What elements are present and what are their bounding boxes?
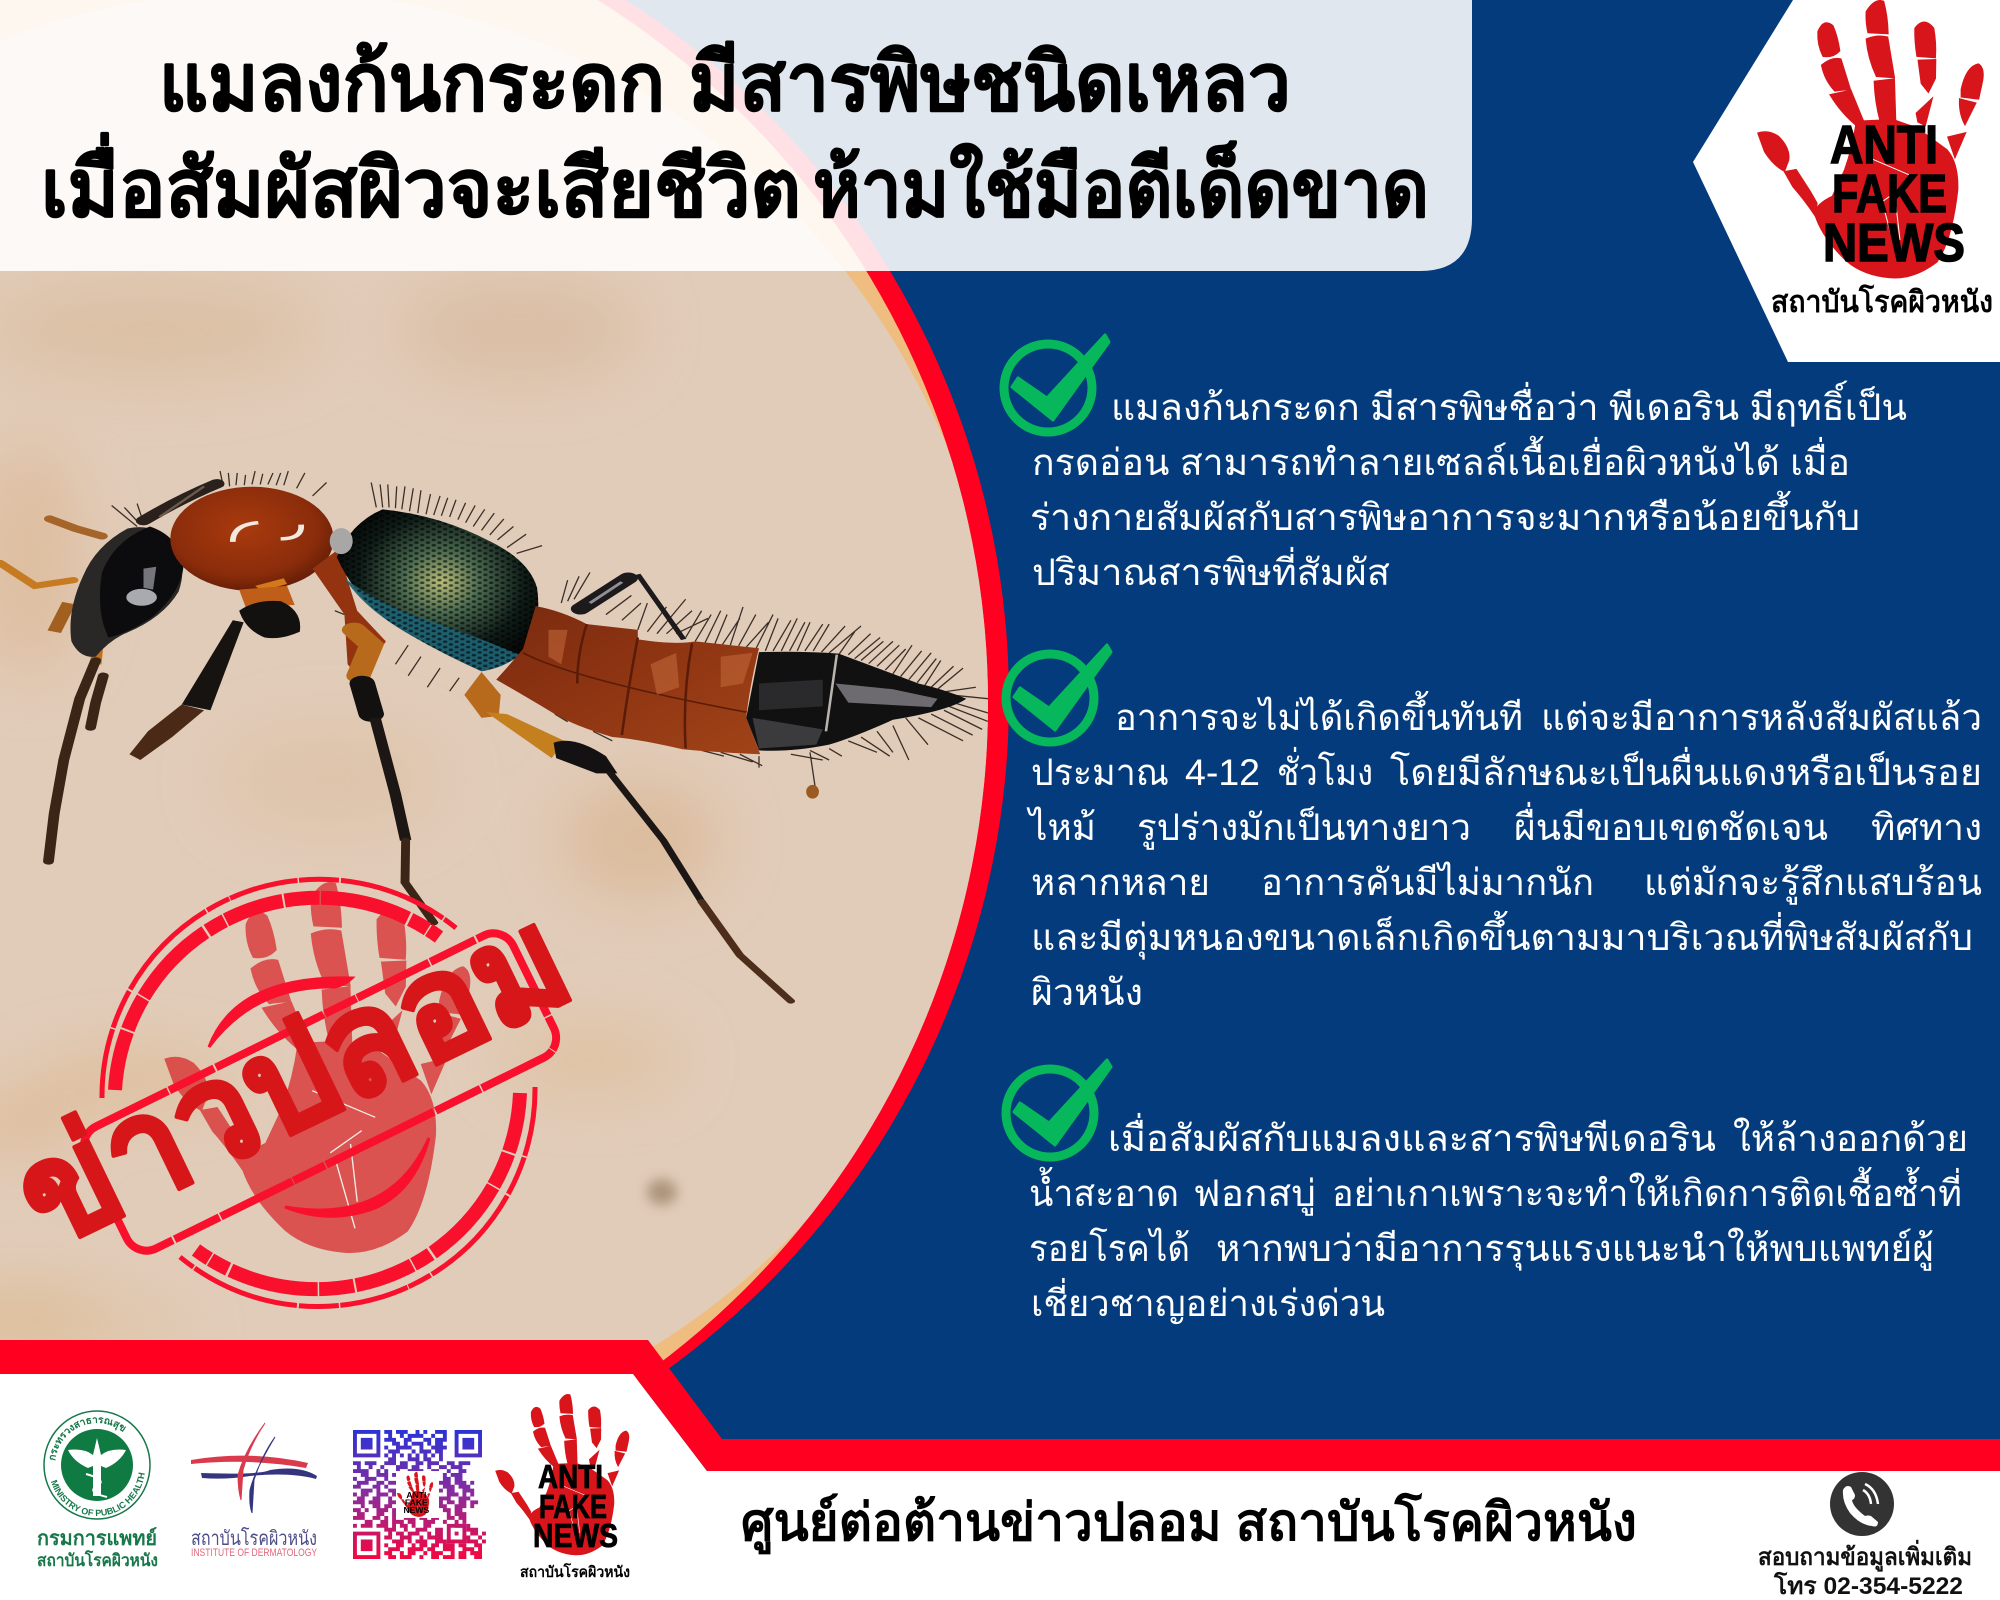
neck [312,552,386,667]
emblem swooshes [191,1423,317,1513]
title [41,38,1429,233]
fact 3 text: รอยโรคได้ [1029,1227,1190,1269]
fact 2 text: ประมาณ [1031,752,1169,793]
photo: rove beetle on beige skin [0,271,988,1346]
logo text: สถาบันโรคผิวหนัง [191,1527,317,1550]
qr centre hand: NEWS [403,1505,429,1515]
stamp: rounded frame [76,926,564,1258]
qr centre hand: FAKE [405,1497,428,1507]
panel: fact 2 [1006,645,1982,1013]
icon: check mark 3 [1006,1060,1111,1157]
fact 2 text: ไหม้ [1026,806,1096,848]
header band [0,0,1472,271]
fact 1 text [1030,380,1907,593]
panel: fact 1 [1004,335,1907,593]
red arc of the photo circle [0,0,1009,1528]
peach arc of the photo circle [0,0,988,1531]
fact 2 text: ผิวหนัง [1031,972,1143,1013]
fact 2 text: โดยมีลักษณะเป็นผื่นแดงหรือเป็นรอย [1390,746,1982,793]
fact 2 text: ผื่นมีขอบเขตชัดเจน [1514,801,1828,848]
emblem: MINISTRY OF PUBLIC HEALTH [51,1472,145,1516]
badge: institute name: สถาบันโรคผิวหนัง [1771,283,1993,319]
stamp: word: ข่าวปลอม [0,878,593,1278]
footer: white panel [0,1374,2000,1600]
fact 2 text: รูปร่างมักเป็นทางยาว [1137,804,1471,850]
fact 2 text: 4-12 [1185,752,1260,793]
emblem: กระทรวงสาธารณสุข [50,1417,126,1460]
qr code [353,1430,486,1559]
fact 1 text: ร่างกายสัมผัสกับสารพิษอาการจะมากหรือน้อยขึ้นกับ [1030,490,1860,538]
head [70,527,182,657]
small ANTI FAKE NEWS: ANTI [538,1458,603,1495]
beetle [0,471,992,1001]
fact 2 text: อาการจะไม่ได้เกิดขึ้นทันที [1115,690,1523,738]
badge: ANTI FAKE NEWS: ANTI [1830,115,1938,175]
badge: ANTI FAKE NEWS [1823,115,1965,273]
small ANTI FAKE NEWS: FAKE [539,1488,607,1525]
contact text: โทร 02-354-5222 [1773,1571,1963,1600]
elytra [337,509,538,671]
logo text: กรมการแพทย์ [37,1527,157,1550]
logo: institute of dermatology [191,1423,318,1559]
far hind leg [580,578,628,609]
logo: ministry of public health [37,1410,158,1570]
emblem [43,1410,151,1520]
stamp: inner arcs [209,978,429,1216]
fact 3 text: เมื่อสัมผัสกับแมลงและสารพิษพีเดอริน [1108,1112,1716,1159]
title: มีสารพิษชนิดเหลว [689,38,1291,127]
contact text: สอบถามข้อมูลเพิ่มเติม [1758,1539,1972,1572]
anti fake news badge [1693,0,2000,362]
fact 3 text: ฟอกสบู่ [1193,1173,1316,1216]
icon: check mark 1 [1004,335,1109,432]
badge: white panel [1693,0,2000,362]
photo dark smudge [647,1179,677,1205]
black tail [746,652,966,751]
fact 1 text: แมลงก้นกระดก มีสารพิษชื่อว่า พีเดอริน มีฤทธิ์เป็น [1111,380,1907,428]
title: เมื่อสัมผัสผิวจะเสียชีวิต [41,132,801,233]
qr centre hand [396,1471,439,1518]
badge: ANTI FAKE NEWS: FAKE [1832,164,1947,224]
fact 3 text: ให้ล้างออกด้วย [1733,1117,1968,1159]
fact 2 text: แต่จะมีอาการหลังสัมผัสแล้ว [1541,697,1982,738]
small hand [496,1395,629,1555]
fact 2 text: และมีตุ่มหนองขนาดเล็กเกิดขึ้นตามมาบริเวณที่พิษสัมผัสกับ [1031,910,1973,960]
hairs [112,471,992,787]
footer heading: ศูนย์ต่อต้านข่าวปลอม สถาบันโรคผิวหนัง [741,1491,1637,1555]
front leg [239,586,295,607]
abdomen [496,606,760,754]
fact 3 text: น้ำสะอาด [1029,1166,1179,1214]
fact 3 text: หากพบว่ามีอาการรุนแรงแนะนำให้พบแพทย์ผู้ [1216,1227,1934,1271]
panel: fact 3 [1006,1060,1968,1325]
photo background blotches [0,280,720,1348]
qr centre hand: ANTI [406,1490,426,1500]
fact 2 text: หลากหลาย [1031,862,1210,903]
logo: institute of dermatology: INSTITUTE OF DERMATOLOGY [191,1547,318,1559]
small institute name: สถาบันโรคผิวหนัง [520,1562,630,1581]
stamp: rings [102,879,535,1307]
fact 2 text: ชั่วโมง [1277,746,1373,793]
logo: ministry of public health: สถาบันโรคผิวหนัง [37,1550,158,1570]
footer: red chevron band [0,1340,2000,1471]
small ANTI FAKE NEWS: NEWS [533,1517,618,1554]
fact 2 text: อาการคันมีไม่มากนัก [1261,861,1594,903]
antenna and mouthparts [0,563,73,586]
fact 3 text: อย่าเกาเพราะจะทำให้เกิดการติดเชื้อซ้ำที่ [1332,1166,1962,1214]
middle leg [354,630,371,676]
title: ห้ามใช้มือตีเด็ดขาด [813,140,1429,233]
droplet [806,785,819,799]
contact text [1758,1539,1972,1600]
badge: red hand [1758,1,1983,278]
fact 2 text: แต่มักจะรู้สึกแสบร้อน [1644,862,1982,905]
title: แมลงก้นกระดก [159,38,665,127]
logo: small anti fake news [496,1395,630,1581]
hind leg [464,672,501,718]
fact 1 text: ปริมาณสารพิษที่สัมผัส [1032,546,1390,593]
fact 3 text [1029,1112,1968,1325]
small ANTI FAKE NEWS [533,1458,618,1554]
fact 1 text: กรดอ่อน สามารถทำลายเซลล์เนื้อเยื่อผิวหนังได้ เมื่อ [1032,435,1850,483]
stamp: faded hand print [166,883,469,1252]
fact 2 text: ทิศทาง [1871,807,1982,848]
fact 2 text [1026,690,1982,1013]
badge: ANTI FAKE NEWS: NEWS [1823,213,1965,273]
icon: check mark 2 [1006,645,1111,742]
fact 3 text: เชี่ยวชาญอย่างเร่งด่วน [1031,1277,1385,1325]
near top leg [144,484,217,521]
fake news stamp [0,878,593,1307]
icon: phone [1830,1472,1894,1536]
pronotum [170,487,334,591]
